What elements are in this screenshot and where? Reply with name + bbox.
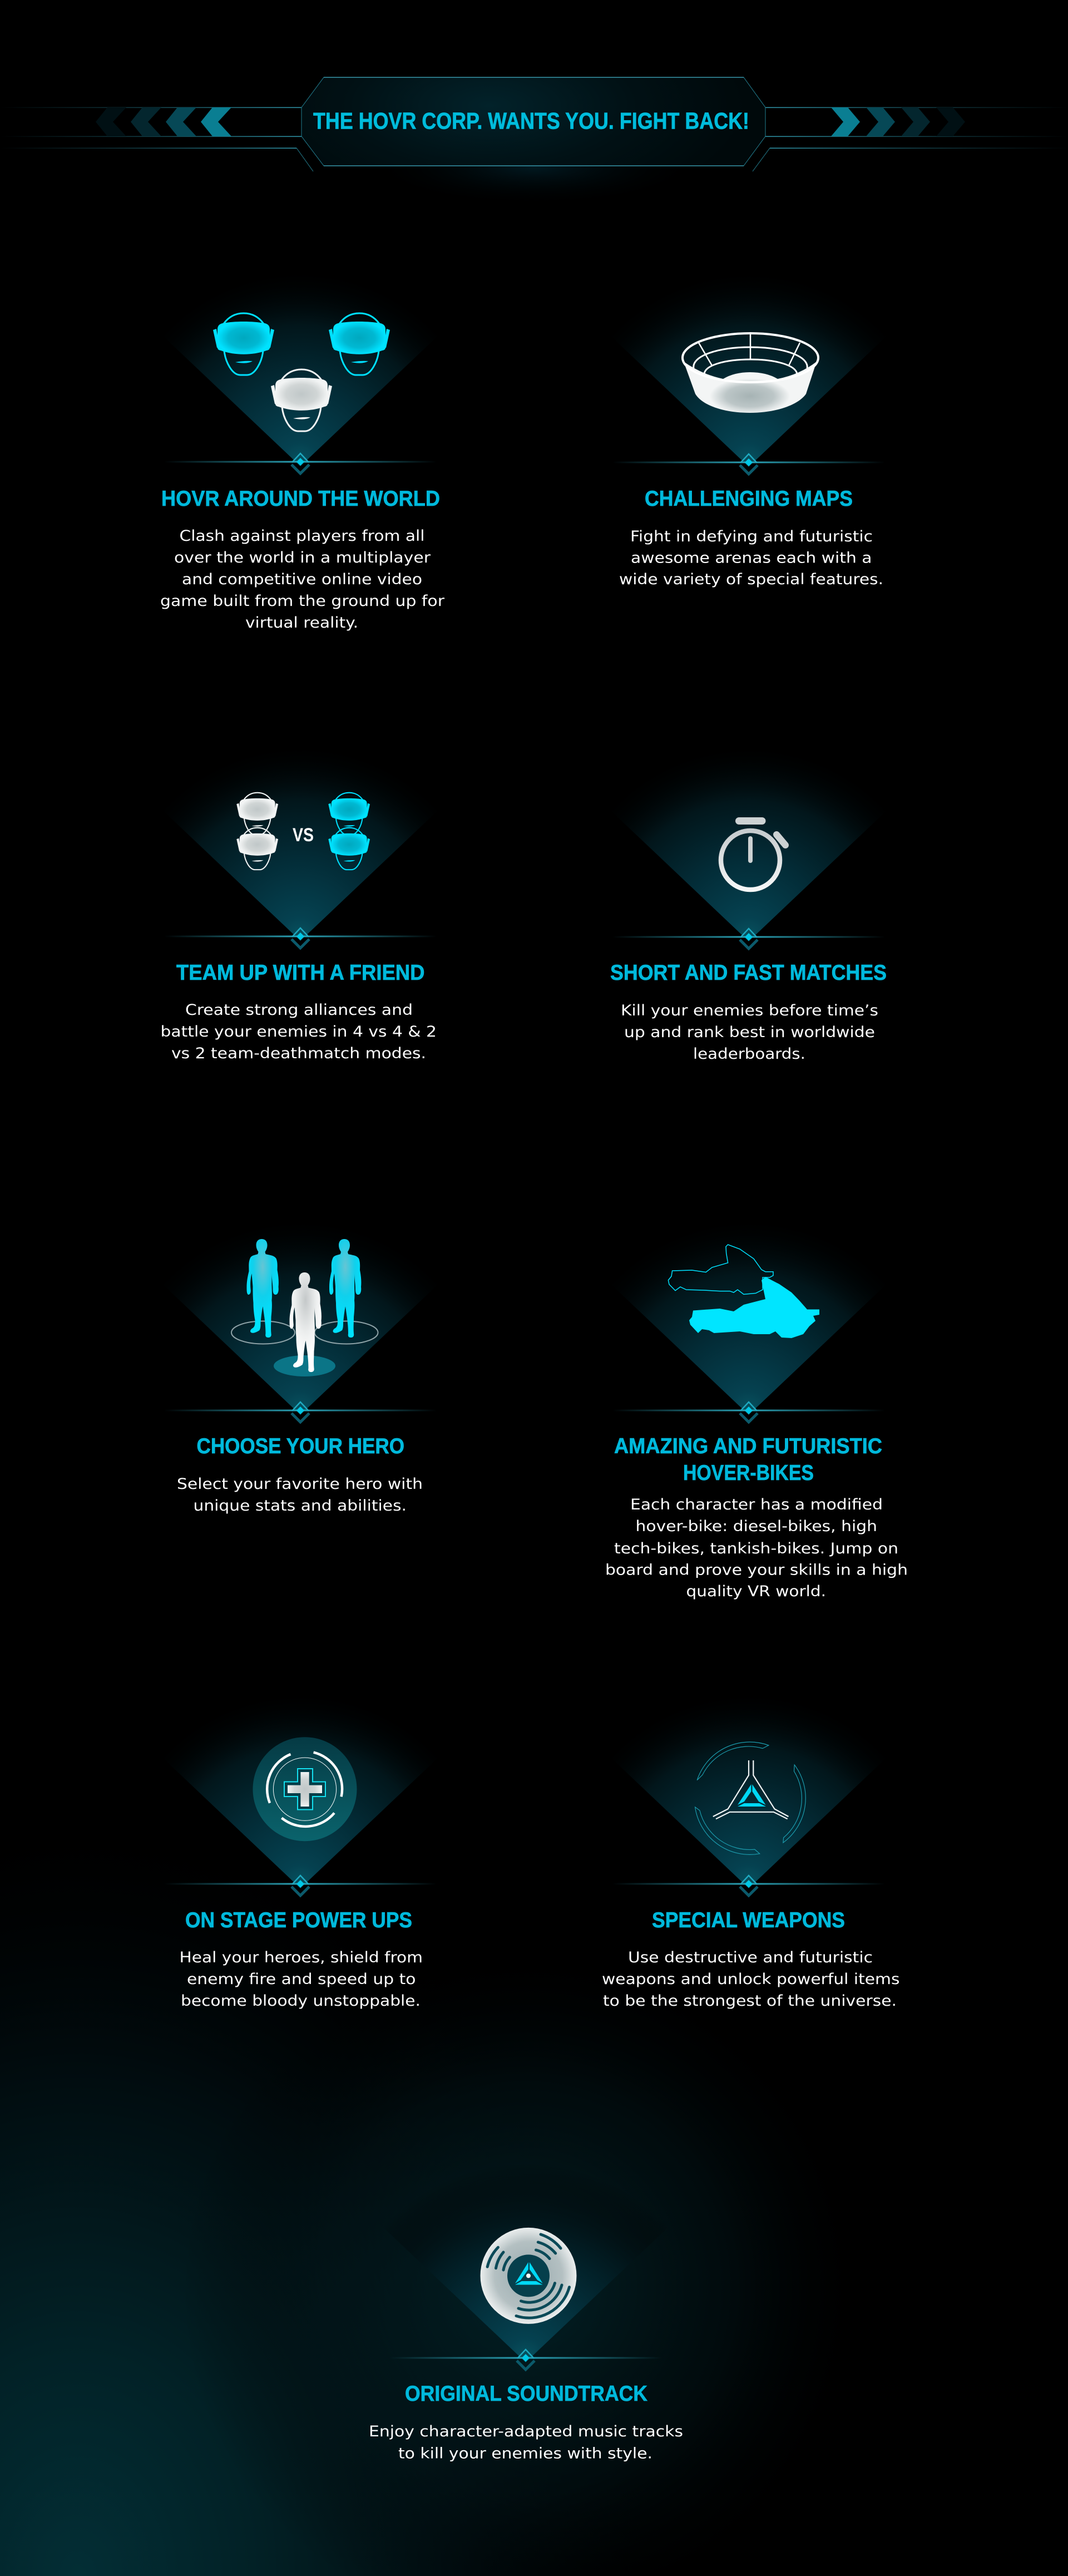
- text block: [160, 1001, 437, 1062]
- heading: HOVER-BIKES: [683, 1461, 814, 1485]
- panel: short and fast matches: [568, 741, 929, 1063]
- text block: Select your favorite hero with: [177, 1475, 423, 1493]
- title: THE HOVR CORP. WANTS YOU. FIGHT BACK!: [313, 108, 749, 134]
- text block: Clash against players from all: [179, 527, 425, 545]
- text block: wide variety of special features.: [619, 571, 883, 588]
- text block: board and prove your skills in a high: [605, 1561, 908, 1579]
- text block: [602, 1949, 900, 2010]
- heading: SHORT AND FAST MATCHES: [610, 961, 887, 985]
- heading: ON STAGE POWER UPS: [185, 1908, 412, 1932]
- heading: HOVR AROUND THE WORLD: [161, 487, 440, 511]
- text block: [619, 528, 883, 588]
- heading: CHOOSE YOUR HERO: [197, 1434, 404, 1458]
- text block: Enjoy character-adapted music tracks: [369, 2423, 683, 2440]
- chevrons right: [831, 107, 965, 136]
- text block: Create strong alliances and: [185, 1001, 413, 1019]
- text block: Kill your enemies before time’s: [621, 1002, 878, 1019]
- panel: hovr around the world: [120, 266, 481, 631]
- text block: Each character has a modified: [630, 1496, 883, 1513]
- text block: [177, 1475, 423, 1514]
- icon: hover-bikes: [668, 1245, 819, 1338]
- heading: TEAM UP WITH A FRIEND: [176, 961, 425, 985]
- chevrons left: [96, 107, 231, 136]
- icon: three vr helmets: [213, 313, 390, 431]
- heading: SPECIAL WEAPONS: [652, 1908, 845, 1932]
- text block: weapons and unlock powerful items: [602, 1971, 900, 1988]
- text block: unique stats and abilities.: [194, 1497, 407, 1514]
- icon: three heroes on platforms: [231, 1239, 378, 1376]
- panel: team up with a friend: [120, 741, 481, 1062]
- text block: virtual reality.: [245, 614, 358, 631]
- heading: AMAZING AND FUTURISTIC: [614, 1434, 882, 1458]
- text block: to be the strongest of the universe.: [603, 1992, 897, 2010]
- text block: Heal your heroes, shield from: [179, 1949, 423, 1966]
- heading: CHALLENGING MAPS: [645, 487, 853, 511]
- text block: quality VR world.: [686, 1583, 826, 1600]
- text block: and competitive online video: [182, 571, 422, 588]
- text block: hover-bike: diesel-bikes, high: [635, 1518, 877, 1535]
- text block: leaderboards.: [693, 1045, 805, 1063]
- text block: vs 2 team-deathmatch modes.: [171, 1045, 426, 1062]
- text block: Use destructive and futuristic: [628, 1949, 873, 1966]
- icon: health power up: [253, 1737, 357, 1841]
- text block: [160, 527, 445, 631]
- panel: special weapons: [568, 1688, 929, 2010]
- text block: [369, 2423, 683, 2463]
- text block: [605, 1496, 908, 1600]
- text block: to kill your enemies with style.: [398, 2445, 652, 2463]
- icon: stopwatch: [721, 817, 785, 890]
- icon: weapon emblem: [695, 1742, 805, 1854]
- panel: choose your hero: [120, 1215, 481, 1514]
- text block: game built from the ground up for: [160, 593, 445, 610]
- panel: amazing and futuristic hover-bikes: [568, 1215, 929, 1600]
- panel: original soundtrack: [345, 2162, 706, 2463]
- text block: tech-bikes, tankish-bikes. Jump on: [614, 1540, 898, 1557]
- panel: on stage power ups: [120, 1688, 481, 2010]
- icon: helmets versus: [236, 793, 370, 870]
- text block: awesome arenas each with a: [631, 550, 872, 566]
- icon: helmets versus: VS: [293, 825, 314, 846]
- text block: enemy fire and speed up to: [187, 1971, 416, 1988]
- heading: ORIGINAL SOUNDTRACK: [405, 2382, 647, 2406]
- text block: up and rank best in worldwide: [624, 1024, 875, 1041]
- panel: challenging maps: [568, 267, 929, 588]
- heading: [614, 1434, 882, 1485]
- icon: arena: [683, 333, 818, 413]
- header banner: [0, 77, 1068, 210]
- text block: [621, 1002, 878, 1063]
- text block: become bloody unstoppable.: [181, 1992, 421, 2010]
- text block: Fight in defying and futuristic: [630, 528, 873, 545]
- text block: [179, 1949, 423, 2010]
- icon: soundtrack disc: [481, 2228, 576, 2324]
- text block: battle your enemies in 4 vs 4 & 2: [160, 1023, 437, 1040]
- text block: over the world in a multiplayer: [174, 549, 431, 566]
